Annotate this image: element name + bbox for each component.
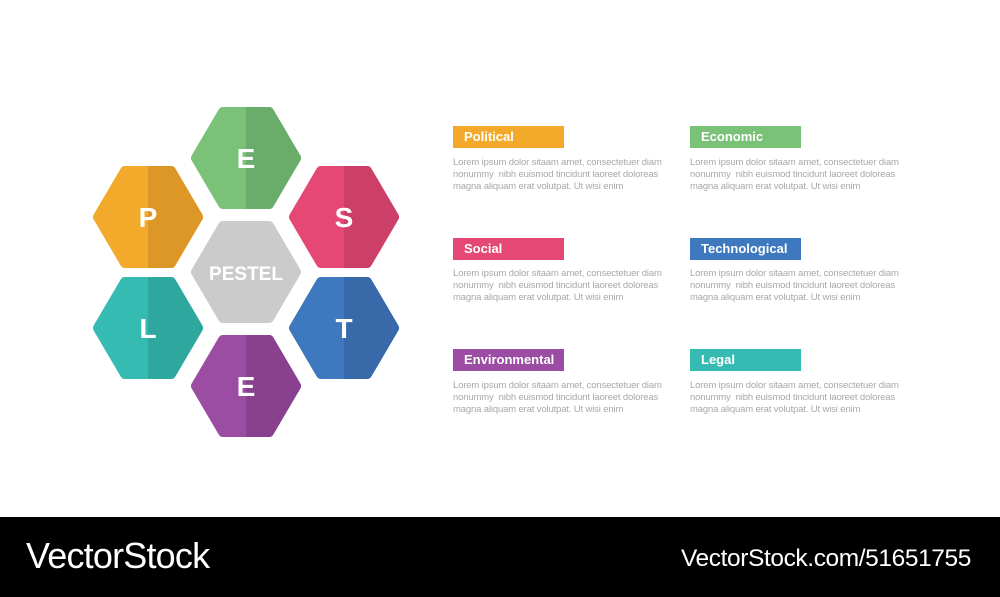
text: Legal bbox=[690, 380, 899, 415]
hex: P political: P bbox=[139, 202, 157, 233]
text: Economic: nonummy nibh euismod tincidunt laoreet doloreas bbox=[690, 169, 895, 180]
text: Economic: Lorem ipsum dolor sitaam amet, consectetuer diam bbox=[690, 157, 899, 168]
label: Technological: Technological bbox=[701, 241, 787, 256]
text: Political bbox=[453, 157, 662, 192]
hexagon diagram bbox=[92, 107, 400, 437]
text: Environmental: Lorem ipsum dolor sitaam amet, consectetuer diam bbox=[453, 380, 662, 391]
footer bar bbox=[0, 517, 1000, 597]
hex: E environmental: E bbox=[237, 371, 255, 402]
hex: L legal bbox=[98, 282, 198, 374]
text: Technological bbox=[690, 268, 899, 303]
text: Social: Lorem ipsum dolor sitaam amet, consectetuer diam bbox=[453, 268, 662, 279]
text: Political: Lorem ipsum dolor sitaam amet, consectetuer diam bbox=[453, 157, 662, 168]
text: Environmental bbox=[453, 380, 662, 415]
hex: PESTEL center bbox=[196, 226, 296, 318]
text: Political: magna aliquam erat volutpat. Ut wisi enim bbox=[453, 181, 623, 192]
hex: T technological: T bbox=[335, 313, 353, 344]
text: Social bbox=[453, 268, 662, 303]
label: Environmental bbox=[453, 349, 564, 371]
hex: E economic: E bbox=[237, 143, 255, 174]
label: Environmental: Environmental bbox=[464, 352, 554, 367]
label: Economic bbox=[690, 126, 801, 148]
text: Technological: magna aliquam erat volutpat. Ut wisi enim bbox=[690, 292, 860, 303]
label: Technological bbox=[690, 238, 801, 260]
hex: P political bbox=[98, 171, 198, 263]
hex: S social: S bbox=[335, 202, 353, 233]
text: Political: nonummy nibh euismod tincidunt laoreet doloreas bbox=[453, 169, 658, 180]
text: Environmental: nonummy nibh euismod tincidunt laoreet doloreas bbox=[453, 392, 658, 403]
hex: PESTEL center: PESTEL bbox=[209, 264, 283, 285]
text: Economic: magna aliquam erat volutpat. Ut wisi enim bbox=[690, 181, 860, 192]
label: Political: Political bbox=[464, 129, 514, 144]
label: Legal: Legal bbox=[701, 352, 735, 367]
text: Economic bbox=[690, 157, 899, 192]
label: Legal bbox=[690, 349, 801, 371]
hex: E environmental bbox=[196, 340, 296, 432]
text: Legal: Lorem ipsum dolor sitaam amet, consectetuer diam bbox=[690, 380, 899, 391]
label: Social: Social bbox=[464, 241, 502, 256]
label: Political bbox=[453, 126, 564, 148]
text: Technological: nonummy nibh euismod tincidunt laoreet doloreas bbox=[690, 280, 895, 291]
text: Legal: magna aliquam erat volutpat. Ut wisi enim bbox=[690, 404, 860, 415]
hex: T technological bbox=[294, 282, 394, 374]
footer url: VectorStock.com/51651755 bbox=[681, 545, 971, 572]
text: Technological: Lorem ipsum dolor sitaam amet, consectetuer diam bbox=[690, 268, 899, 279]
text: Social: nonummy nibh euismod tincidunt laoreet doloreas bbox=[453, 280, 658, 291]
hex: E economic bbox=[196, 112, 296, 204]
text: Environmental: magna aliquam erat volutpat. Ut wisi enim bbox=[453, 404, 623, 415]
hex: S social bbox=[294, 171, 394, 263]
footer brand: VectorStock bbox=[26, 535, 209, 576]
hex: L legal: L bbox=[139, 313, 157, 344]
label: Economic: Economic bbox=[701, 129, 763, 144]
text: Legal: nonummy nibh euismod tincidunt laoreet doloreas bbox=[690, 392, 895, 403]
label: Social bbox=[453, 238, 564, 260]
text: Social: magna aliquam erat volutpat. Ut wisi enim bbox=[453, 292, 623, 303]
